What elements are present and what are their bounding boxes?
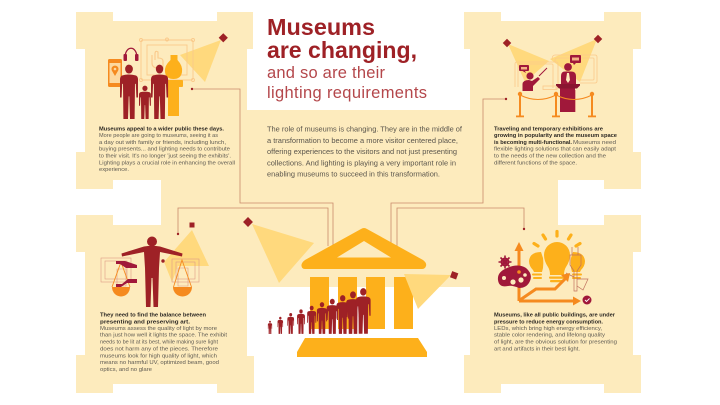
intro paragraph: collections. And lighting is playing a very important role in <box>267 158 456 167</box>
text: energy: stable color rendering, and lifelong quality <box>494 333 605 339</box>
icon: family <box>120 65 168 119</box>
text: temporary exhibitions: different functions of the space. <box>494 160 577 166</box>
text: temporary exhibitions: Museums need <box>573 140 616 146</box>
centre spotlight: left <box>243 217 314 283</box>
icon: exhibition frames <box>515 55 597 90</box>
icon: spotlight beams <box>503 35 602 82</box>
intro paragraph <box>267 124 463 179</box>
text: balance: needs to be lit at its best, while making sure light <box>100 340 218 346</box>
text: temporary exhibitions <box>494 126 617 166</box>
panel: energy <box>494 232 617 352</box>
intro paragraph: enabling museums to succeed in this transformation. <box>267 170 440 179</box>
panel: balance <box>100 222 227 373</box>
text: balance: means no harmful UV, optimized beam, good <box>100 360 219 366</box>
title: Museums <box>267 14 375 40</box>
text: temporary exhibitions: is becoming multi-functional. <box>494 140 572 146</box>
icon: balance scale pans <box>112 260 192 296</box>
icon: spotlight and beam <box>180 33 228 82</box>
text: balance: museums look for high quality of light, which <box>100 353 217 359</box>
text: balance: Museums assess the quality of light by more <box>100 326 217 332</box>
icon: museum building <box>297 228 427 357</box>
icon: headphones <box>124 48 138 61</box>
icon: guide at podium <box>556 63 580 112</box>
text: energy: LEDs, which bring high energy efficiency, <box>494 326 602 332</box>
intro paragraph: a transformation to become a more visitor centered place, <box>267 136 458 145</box>
text: balance <box>100 312 227 373</box>
text: wider public: to their visit. It's no longer 'just seeing the exhibits'. <box>99 154 231 160</box>
text: wider public <box>99 126 235 173</box>
text: temporary exhibitions: Traveling and temporary exhibitions are <box>494 126 603 132</box>
cream background panels <box>76 12 641 393</box>
icon: artwork frames <box>101 258 199 286</box>
icon: light bulbs <box>529 232 585 282</box>
text: balance: presenting and preserving art. <box>100 319 190 325</box>
intro paragraph: The role of museums is changing. They are in the middle of <box>267 124 463 134</box>
intro paragraph: offering experiences to the visitors and not just presenting <box>267 147 457 156</box>
text: energy: pressure to reduce energy consumption. <box>494 319 603 325</box>
text: temporary exhibitions: to the needs of the new collection and the <box>494 154 606 160</box>
icon: hands <box>116 261 137 287</box>
text: wider public: buying presents... and lighting needs to contribute <box>99 147 230 153</box>
icon: smartphone <box>108 59 122 87</box>
text: temporary exhibitions: growing in popularity and the museum space <box>494 133 617 139</box>
panel: temporary exhibitions <box>494 35 617 166</box>
connector lines <box>177 88 525 246</box>
icon: visitor with pointer <box>522 68 547 91</box>
text: energy: art and artifacts in their best light. <box>494 346 580 352</box>
icon: queue of visitors <box>268 288 371 334</box>
text: wider public: experience. <box>99 167 129 173</box>
icon: vase on pedestal <box>165 55 183 116</box>
text: temporary exhibitions: flexible lighting solutions that can easily adapt <box>494 147 616 153</box>
text: wider public: Museums appeal to a wider public these days. <box>99 126 224 132</box>
text: wider public: a day out with family or friends, including lunch, <box>99 140 226 146</box>
title: lighting requirements <box>267 84 427 102</box>
text: energy <box>494 312 617 352</box>
text: balance: optics, and no glare <box>100 367 152 373</box>
text: balance: than just how well it lights the space. The exhibit <box>100 333 227 339</box>
text: energy: Museums, like all public buildings, are under <box>494 312 616 318</box>
icon: check badge <box>582 296 592 304</box>
text: balance: does not harm any of the pieces. Therefore <box>100 346 218 352</box>
icon: plug outline <box>566 247 588 291</box>
text: wider public: Lighting plays a crucial role in enhancing the overall <box>99 160 235 166</box>
title <box>267 14 427 102</box>
icon: picture frame <box>140 38 194 82</box>
centre spotlight: right <box>404 271 458 309</box>
icon: paint palette and flower <box>498 256 531 288</box>
text: wider public: More people are going to museums, seeing it as <box>99 133 218 139</box>
icon: growth arrows <box>514 242 581 306</box>
icon: stanchions and ropes <box>516 92 596 117</box>
text: energy: of light, are the obvious solution for presenting <box>494 340 617 346</box>
text: balance: They need to find the balance between <box>100 312 207 318</box>
icon: person with outstretched arms <box>122 236 182 307</box>
icon: spotlight beam <box>164 222 209 282</box>
title: and so are their <box>267 64 386 82</box>
icon: speech bubbles <box>519 55 581 73</box>
panel: wider public <box>99 33 235 173</box>
title: are changing, <box>267 37 417 63</box>
